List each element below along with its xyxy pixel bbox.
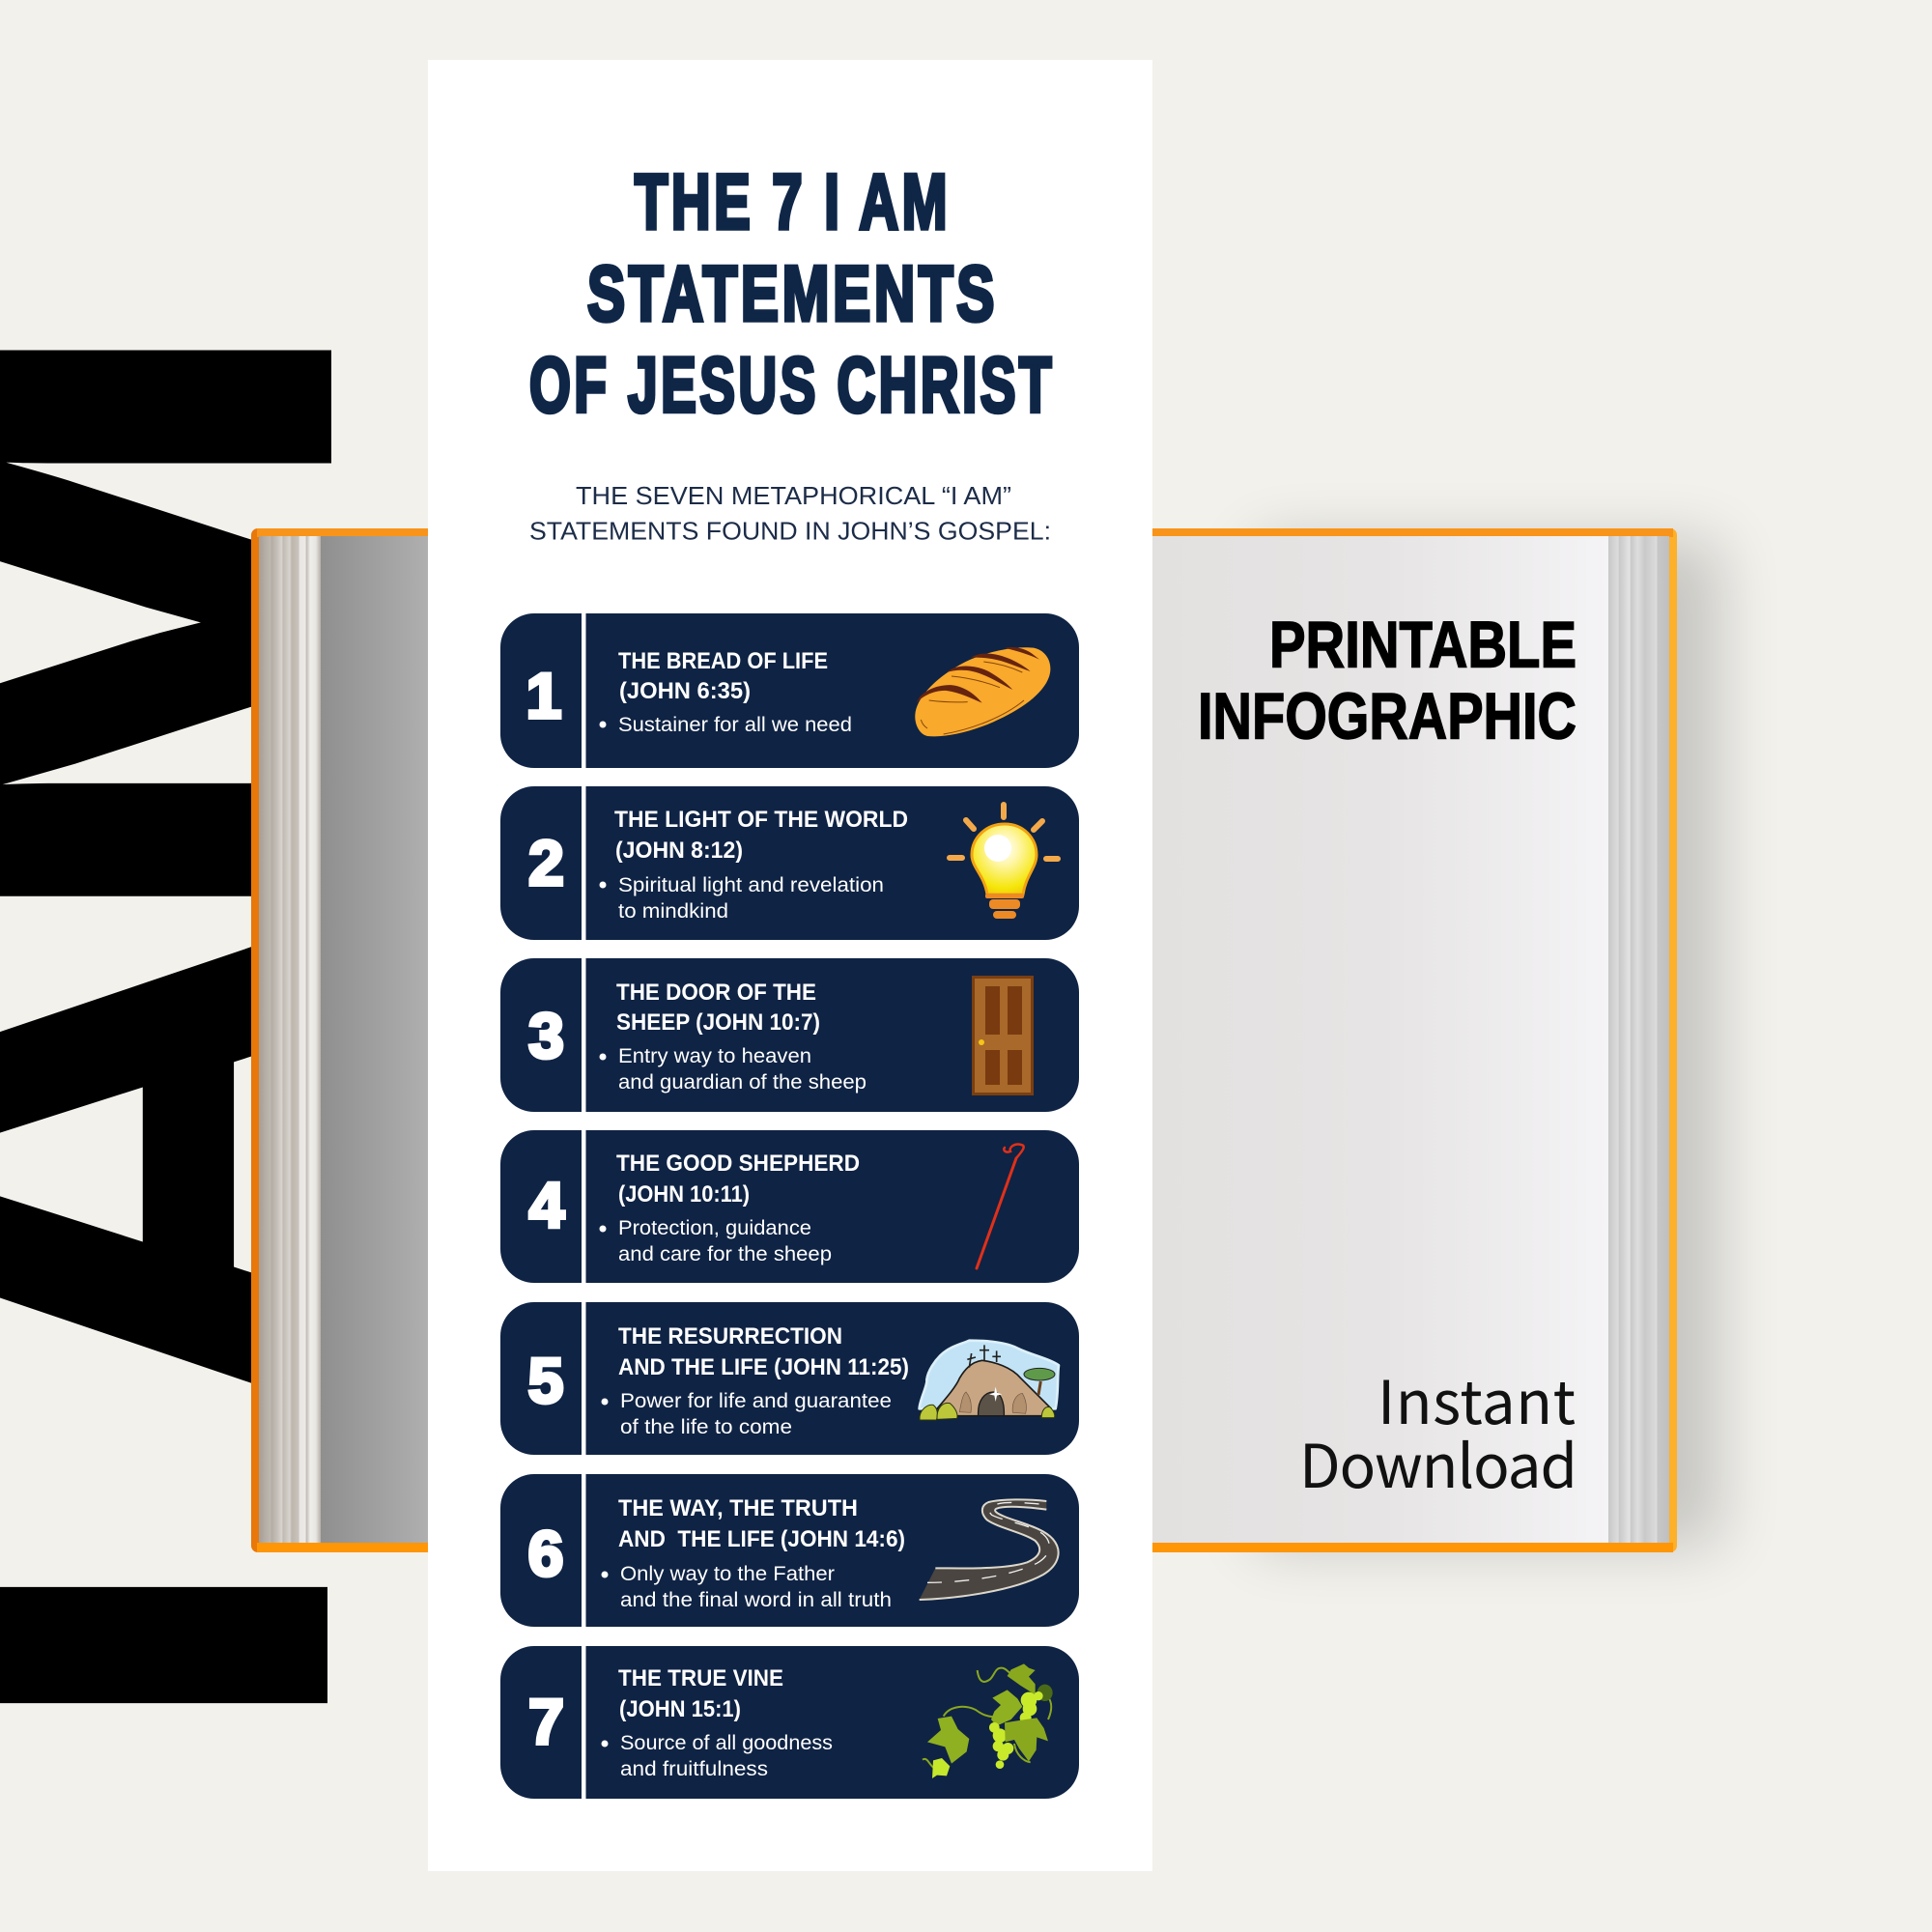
title: STATEMENTS: [587, 251, 998, 338]
description 4: Protection, guidance: [618, 1217, 811, 1239]
instant download label: [1299, 1354, 1577, 1505]
heading 1: (JOHN 6:35): [619, 678, 751, 704]
book cover: top edge: [257, 528, 1673, 537]
heading 1: [618, 648, 828, 704]
right page: [1152, 536, 1608, 1543]
book cover: bottom edge: [257, 1543, 1673, 1552]
heading 3: [616, 980, 820, 1036]
icon: grape vine: [923, 1663, 1053, 1778]
icon: empty tomb: [920, 1341, 1059, 1420]
number 2: 2: [528, 827, 564, 898]
heading 2: [614, 807, 908, 864]
title: THE 7 I AM: [635, 158, 951, 245]
icon: door: [972, 976, 1034, 1095]
book shadow: [1256, 541, 1719, 1546]
panel: statement 4: [500, 1130, 1079, 1283]
panel: statement 6: [500, 1474, 1079, 1627]
icon: bread: [915, 647, 1050, 736]
description 4: [599, 1217, 832, 1265]
heading 4: [616, 1151, 860, 1208]
icon: light bulb: [950, 805, 1058, 919]
description 4: and care for the sheep: [618, 1243, 832, 1265]
description 7: [601, 1732, 833, 1780]
icon: winding road: [920, 1499, 1059, 1600]
heading 5: THE RESURRECTION: [618, 1323, 842, 1350]
heading 3: THE DOOR OF THE: [616, 980, 816, 1006]
number 1: 1: [526, 660, 561, 731]
panel: statement 2: [500, 786, 1079, 940]
heading 4: (JOHN 10:11): [618, 1181, 750, 1208]
number 6: 6: [528, 1518, 563, 1589]
icon: shepherd staff: [977, 1145, 1024, 1268]
number 7: 7: [528, 1686, 564, 1757]
description 6: and the final word in all truth: [620, 1589, 892, 1611]
heading 2: (JOHN 8:12): [615, 838, 743, 864]
right page edges: [1608, 536, 1669, 1543]
white infographic card: [428, 60, 1152, 1871]
panel: statement 3: [500, 958, 1079, 1112]
subtitle: STATEMENTS FOUND IN JOHN’S GOSPEL:: [529, 518, 1051, 545]
description 2: [599, 874, 884, 923]
heading 7: (JOHN 15:1): [619, 1696, 741, 1722]
heading 6: THE WAY, THE TRUTH: [618, 1495, 858, 1521]
number 3: 3: [528, 1000, 564, 1071]
description 5: of the life to come: [620, 1416, 792, 1438]
description 7: and fruitfulness: [620, 1758, 768, 1780]
book cover: left edge: [251, 528, 267, 1552]
heading 5: [618, 1323, 909, 1380]
book cover: right edge: [1662, 528, 1677, 1552]
heading 6: AND THE LIFE (JOHN 14:6): [618, 1526, 905, 1552]
heading 4: THE GOOD SHEPHERD: [616, 1151, 860, 1177]
instant download label: Download: [1299, 1418, 1577, 1505]
printable infographic label: PRINTABLE: [1269, 609, 1577, 682]
subtitle: [529, 483, 1051, 545]
left page: [321, 536, 428, 1543]
heading 6: [618, 1495, 905, 1552]
printable infographic label: [1198, 609, 1577, 753]
number 4: 4: [529, 1169, 565, 1240]
heading 1: THE BREAD OF LIFE: [618, 648, 828, 674]
number 5: 5: [528, 1345, 563, 1416]
description 3: [599, 1045, 867, 1094]
description 5: [601, 1390, 892, 1438]
heading 2: THE LIGHT OF THE WORLD: [614, 807, 908, 833]
description 1: Sustainer for all we need: [618, 714, 852, 736]
description 2: to mindkind: [618, 900, 728, 923]
title: OF JESUS CHRIST: [529, 342, 1055, 429]
heading 7: [618, 1665, 783, 1722]
description 3: and guardian of the sheep: [618, 1071, 867, 1094]
title: [529, 158, 1055, 429]
instant download label: Instant: [1378, 1354, 1576, 1441]
description 5: Power for life and guarantee: [620, 1390, 892, 1412]
panel: statement 5: [500, 1302, 1079, 1455]
description 6: [601, 1563, 892, 1611]
description 2: Spiritual light and revelation: [618, 874, 884, 896]
heading 5: AND THE LIFE (JOHN 11:25): [618, 1354, 909, 1380]
large rotated I AM lettering: [0, 307, 560, 1757]
heading 7: THE TRUE VINE: [618, 1665, 783, 1691]
left page edges: [259, 536, 321, 1543]
open book: [251, 528, 1719, 1552]
panel: statement 7: [500, 1646, 1079, 1799]
panel: statement 1: [500, 613, 1079, 768]
heading 3: SHEEP (JOHN 10:7): [616, 1009, 820, 1036]
printable infographic label: INFOGRAPHIC: [1198, 680, 1577, 753]
description 7: Source of all goodness: [620, 1732, 833, 1754]
description 6: Only way to the Father: [620, 1563, 835, 1585]
subtitle: THE SEVEN METAPHORICAL “I AM”: [576, 483, 1011, 510]
description 3: Entry way to heaven: [618, 1045, 811, 1067]
